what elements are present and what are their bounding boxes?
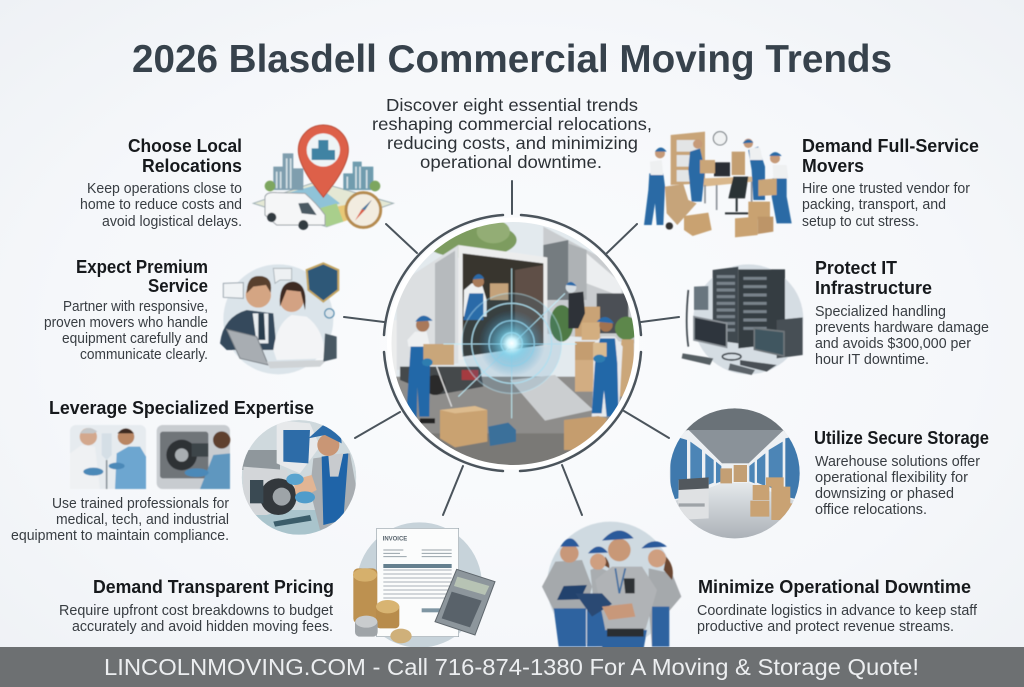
panel: expect premium service [44, 256, 338, 374]
body text: Use trained professionals for [52, 496, 229, 512]
icon: movers packing an office [644, 132, 792, 237]
heading: Protect IT [815, 257, 898, 278]
heading: Choose Local [128, 135, 242, 156]
body text: packing, transport, and [802, 197, 946, 213]
intro text: Discover eight essential trends [386, 95, 638, 115]
body text: downsizing or phased [815, 486, 954, 502]
body text [815, 454, 980, 518]
body text: Require upfront cost breakdowns to budget [59, 603, 333, 619]
body text: and avoids $300,000 per [815, 336, 971, 352]
panel: protect IT infrastructure [682, 257, 989, 375]
heading: Minimize Operational Downtime [698, 576, 971, 597]
heading: Relocations [142, 155, 242, 176]
heading: Infrastructure [815, 277, 932, 298]
icon: invoice, coins and calculator: INVOICE [383, 536, 407, 542]
body text: accurately and avoid hidden moving fees. [72, 619, 333, 635]
footer call to action [0, 647, 1024, 687]
panel: demand full-service movers [644, 132, 979, 237]
body text: Partner with responsive, [63, 299, 208, 315]
icon: storage warehouse corridor [669, 407, 802, 540]
body text: home to reduce costs and [80, 197, 242, 213]
body text: productive and protect revenue streams. [697, 619, 954, 635]
heading: Leverage Specialized Expertise [49, 397, 314, 418]
heading [802, 135, 979, 176]
icon: map pin, city, van and compass [253, 125, 393, 230]
icon: invoice, coins and calculator [353, 522, 495, 648]
heading [76, 256, 208, 296]
central photo: movers unloading truck [392, 222, 634, 465]
intro text: reducing costs, and minimizing [387, 133, 638, 153]
body text: Specialized handling [815, 304, 946, 320]
heading [128, 135, 242, 176]
icon: logistics team with clipboards [542, 522, 681, 648]
body text: operational flexibility for [815, 470, 968, 486]
body text: Keep operations close to [87, 181, 242, 197]
body text: equipment to maintain compliance. [11, 528, 229, 544]
body text [11, 496, 229, 544]
icon: technician servicing equipment [242, 420, 357, 537]
body text: office relocations. [815, 502, 927, 518]
body text [697, 603, 978, 635]
icon: server racks and monitors [682, 264, 803, 375]
icons: specialist photos [70, 425, 230, 489]
panel: utilize secure storage [669, 407, 989, 540]
heading: Movers [802, 155, 864, 176]
body text: communicate clearly. [80, 347, 208, 363]
panel: minimize operational downtime [542, 522, 978, 648]
panel: choose local relocations [80, 125, 393, 230]
intro text: reshaping commercial relocations, [372, 114, 652, 134]
intro text: operational downtime. [420, 152, 602, 172]
body text [815, 304, 989, 368]
body text [802, 181, 970, 230]
heading: Demand Full-Service [802, 135, 979, 156]
title: 2026 Blasdell Commercial Moving Trends [132, 38, 892, 81]
body text: Warehouse solutions offer [815, 454, 980, 470]
icon: customer service agents [220, 263, 338, 374]
footer call to action: LINCOLNMOVING.COM - Call 716-874-1380 For A Moving & Storage Quote! [104, 654, 919, 680]
heading: Utilize Secure Storage [814, 427, 989, 448]
body text: proven movers who handle [44, 315, 208, 331]
heading [815, 257, 932, 298]
heading: Expect Premium [76, 256, 208, 277]
body text: Hire one trusted vendor for [802, 181, 970, 197]
panel: demand transparent pricing [59, 522, 495, 648]
body text: avoid logistical delays. [102, 214, 242, 230]
body text: medical, tech, and industrial [56, 512, 229, 528]
body text: hour IT downtime. [815, 352, 929, 368]
heading: Service [148, 275, 208, 296]
body text: prevents hardware damage [815, 320, 989, 336]
body text [59, 603, 333, 635]
body text: equipment carefully and [62, 331, 208, 347]
body text: Coordinate logistics in advance to keep staff [697, 603, 978, 619]
panel: leverage specialized expertise [11, 397, 357, 544]
connector spokes and ring [344, 181, 679, 515]
body text: setup to cut stress. [802, 214, 919, 230]
body text [80, 181, 242, 230]
intro text [372, 95, 652, 172]
body text [44, 299, 208, 363]
heading: Demand Transparent Pricing [93, 576, 334, 597]
